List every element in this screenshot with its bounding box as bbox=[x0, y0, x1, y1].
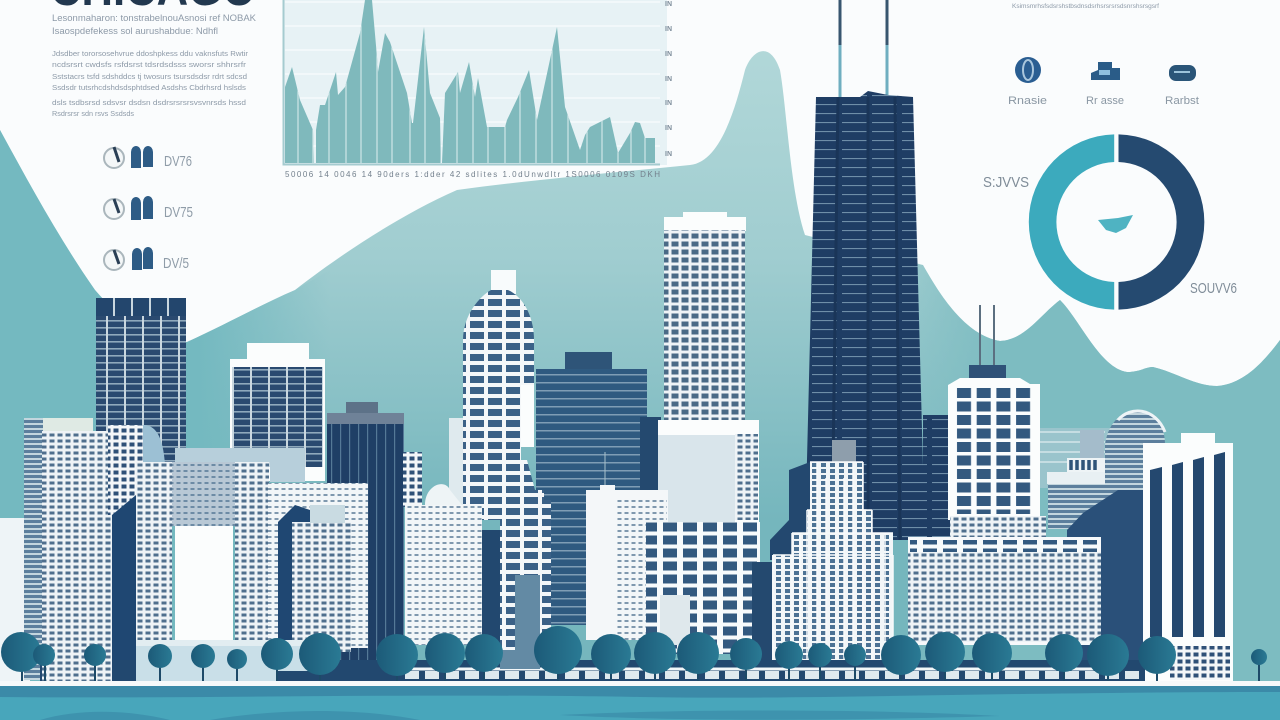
intro text block: Ssdsdr tutsrhcdshdsdsphtdsed Asdshs Cbdrhsrd hslsds bbox=[52, 85, 247, 92]
building: far right stripes and dome bbox=[1040, 410, 1165, 682]
donut centre icon bbox=[1098, 215, 1133, 233]
chart right axis labels: IN bbox=[665, 76, 672, 83]
building: left tower bbox=[24, 418, 165, 681]
building: white slab bbox=[586, 452, 668, 640]
chart bottom axis labels: 50006 14 0046 14 90ders 1:dder 42 sdlites 1.0dUnwdltr 1S0006 0109S DKH bbox=[285, 170, 660, 179]
chart right axis labels: IN bbox=[665, 151, 672, 158]
building: wide low block bbox=[908, 537, 1101, 645]
trees bbox=[1, 626, 1267, 682]
building: lattice tower bbox=[772, 440, 893, 670]
foreground right cluster bbox=[772, 305, 1233, 682]
building: dark vertical stripes bbox=[327, 402, 404, 664]
shoreline and water bbox=[0, 681, 1280, 720]
chart right axis labels: IN bbox=[665, 51, 672, 58]
building: dark wedge bbox=[112, 495, 136, 681]
building: dark gap bbox=[482, 530, 502, 645]
chart right axis labels: IN bbox=[665, 1, 672, 8]
building: white windows block bbox=[405, 505, 482, 645]
donut chart bbox=[1029, 134, 1204, 310]
building: center block bbox=[172, 448, 305, 647]
icon: cloud badge bbox=[1169, 65, 1196, 81]
area chart bbox=[283, 0, 672, 179]
stat row 2: DV75 bbox=[164, 204, 193, 221]
stat row 3 bbox=[104, 247, 189, 272]
building: white cap tower bbox=[230, 343, 325, 481]
intro text block: Sststacrs tsfd sdshddcs tj twosurs tsursdsdsr rdrt sdcsd bbox=[52, 74, 247, 81]
intro text block: Lesonmaharon: tonstrabelnouAsnosi ref NOBAK bbox=[52, 13, 256, 23]
chart right axis labels: IN bbox=[665, 26, 672, 33]
icon: globe bbox=[1015, 57, 1041, 83]
donut label left: S:JVVS bbox=[983, 174, 1029, 191]
icon label: first: Rnasie bbox=[1008, 95, 1047, 107]
stat row 1: DV76 bbox=[164, 153, 192, 170]
chart right axis labels bbox=[665, 1, 672, 158]
building: grid tower front bbox=[500, 460, 551, 670]
building: dark right block bbox=[770, 415, 953, 560]
street base bbox=[40, 640, 1145, 682]
building: Hancock tower bbox=[805, 0, 925, 540]
icon label: second: Rr asse bbox=[1086, 95, 1124, 107]
building: narrow block bbox=[403, 452, 462, 507]
intro text block: Rsdrsrsr sdn rsvs Ssdsds bbox=[52, 111, 135, 118]
intro text block: dsls tsdbsrsd sdsvsr dsdsn dsdrsrsrsrsvsvnrsds hssd bbox=[52, 100, 246, 107]
stat row 2 bbox=[104, 196, 193, 221]
building: slim white tower bbox=[136, 462, 172, 652]
icon label: third: Rarbst bbox=[1165, 95, 1199, 107]
building: dark-window block bbox=[646, 522, 760, 654]
building: right of centre block bbox=[268, 483, 368, 660]
top right caption: Ksimsmrhsfsdsrshstbsdnsdsrhsrsrsrsdsnrshsrsgsrf bbox=[1012, 3, 1159, 10]
intro text block bbox=[52, 13, 256, 118]
stat row 3: DV/5 bbox=[163, 255, 189, 272]
building: dome tower bbox=[449, 270, 534, 520]
stat row 1 bbox=[104, 146, 192, 170]
foreground centre cluster bbox=[403, 452, 773, 670]
back buildings bbox=[96, 0, 1165, 682]
building: white cap tower with antennas bbox=[948, 305, 1046, 538]
building: dark left tower bbox=[96, 298, 186, 468]
icon: people group bbox=[1091, 62, 1120, 80]
building: blue wide tower bbox=[536, 352, 661, 625]
donut label right: SOUVV6 bbox=[1190, 280, 1237, 297]
intro text block: ncdsrsrt cwdsfs rsfdsrst tdsrdsdsss sworsr shhrsrfr bbox=[52, 62, 247, 69]
chart right axis labels: IN bbox=[665, 125, 672, 132]
intro text block: Isaospdefekess sol aurushabdue: Ndhfl bbox=[52, 26, 218, 36]
intro text block: Jdsdber tororsosehvrue ddoshpkess ddu vaknsfuts Rwtir bbox=[52, 51, 249, 58]
foreground left cluster bbox=[24, 418, 368, 681]
building: dark edge bbox=[752, 562, 773, 667]
chart right axis labels: IN bbox=[665, 100, 672, 107]
building: tall grid tower bbox=[658, 212, 759, 525]
building: white columns bbox=[1143, 433, 1233, 682]
